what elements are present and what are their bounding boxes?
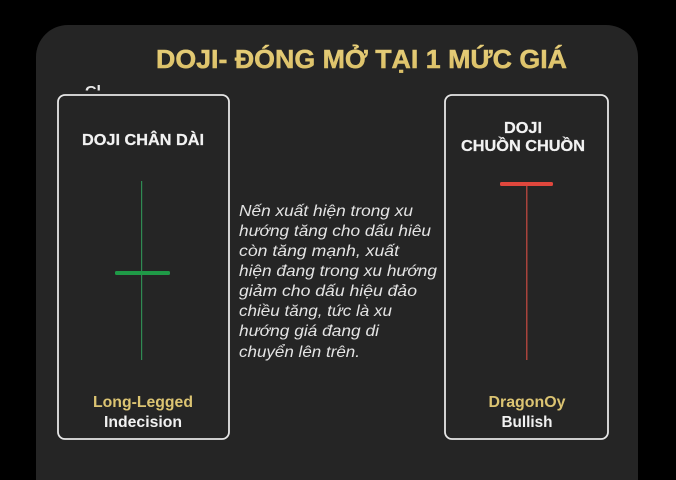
description text block: giảm cho dấu hiệu đảo bbox=[239, 283, 417, 300]
panel: dragonfly doji card bbox=[445, 95, 608, 439]
clipped text fragment above left card: Cl bbox=[85, 83, 101, 100]
description text block: Nến xuất hiện trong xu bbox=[239, 203, 413, 220]
description text block: hướng tăng cho dấu hiêu bbox=[239, 223, 431, 240]
card caption: Long-Legged: Long-Legged bbox=[93, 394, 193, 411]
card outline bbox=[445, 95, 608, 439]
description text block: hiện đang trong xu hướng bbox=[239, 263, 437, 280]
description text block: chiều tăng, tức là xu bbox=[239, 303, 392, 320]
description text block bbox=[239, 203, 437, 361]
card heading: DOJI CHÂN DÀI bbox=[82, 130, 204, 149]
card caption: DragonOy: DragonOy bbox=[488, 394, 566, 411]
description text block: hướng giá đang di bbox=[239, 323, 379, 340]
candlestick: green long-legged doji bbox=[115, 181, 170, 360]
card caption: Indecision: Indecision bbox=[104, 414, 182, 431]
card outline bbox=[58, 95, 229, 439]
card caption: Bullish: Bullish bbox=[502, 414, 552, 431]
card heading: DOJI bbox=[504, 120, 542, 137]
description text block: còn tăng mạnh, xuất bbox=[239, 243, 400, 260]
description text block: chuyển lên trên. bbox=[239, 343, 360, 361]
card heading: CHUỒN CHUỒN bbox=[461, 136, 585, 155]
title: DOJI- ĐÓNG MỞ TẠI 1 MỨC GIÁ bbox=[156, 43, 567, 74]
candlestick: red dragonfly doji bbox=[500, 182, 553, 360]
panel: long-legged doji card bbox=[58, 95, 229, 439]
